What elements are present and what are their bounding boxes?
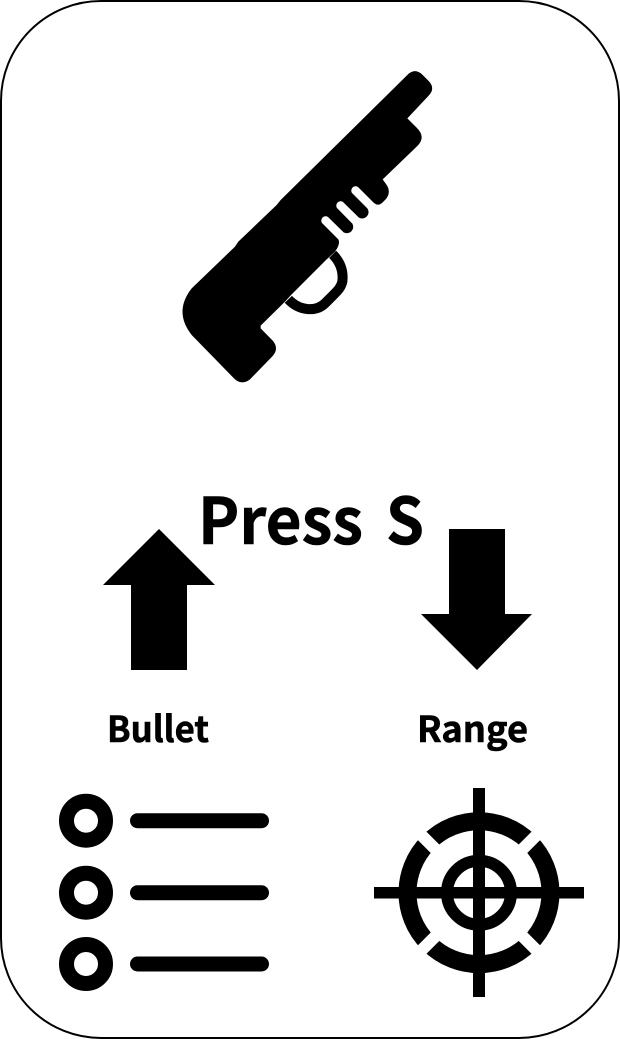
label: Range: Range: [417, 701, 528, 753]
icon: crosshair target: [374, 788, 584, 997]
icon: shotgun: [182, 71, 432, 382]
heading: Press S: S: [386, 471, 424, 563]
trigger guard: [288, 254, 343, 309]
arrow: down: [421, 529, 532, 670]
arrow: up: [103, 529, 215, 670]
heading: Press S: Press: [198, 471, 363, 563]
icon: bullet list: [66, 801, 262, 984]
label: Bullet: Bullet: [107, 701, 209, 753]
